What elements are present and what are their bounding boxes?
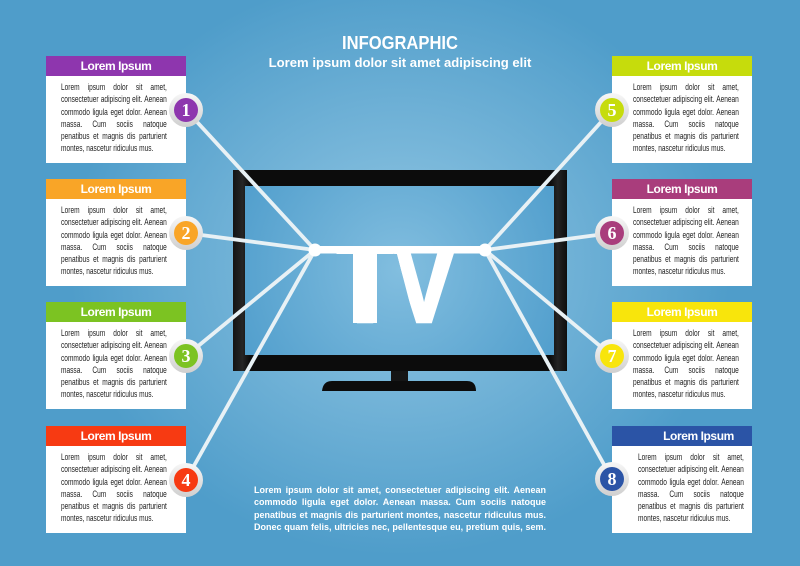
panel: item 5: commodo ligula eget dolor. Aenean xyxy=(632,107,738,117)
badge 3 xyxy=(169,339,203,373)
panel: item 5: montes, nascetur ridiculus mus. xyxy=(632,143,725,153)
panel: item 4: consectetuer adipiscing elit. Aenean xyxy=(60,464,166,474)
bottom text block xyxy=(254,485,546,532)
panel: item 5: Lorem Ipsum xyxy=(647,59,717,73)
panel: item 7: penatibus et magnis dis parturient xyxy=(632,377,738,387)
badge 1 xyxy=(169,93,203,127)
bottom text block: Lorem ipsum dolor sit amet, consectetuer adipiscing elit. Aenean xyxy=(254,485,546,495)
panel: item 8: consectetuer adipiscing elit. Aenean xyxy=(638,464,743,474)
panel: item 5 xyxy=(612,56,752,163)
panel: item 1: consectetuer adipiscing elit. Aenean xyxy=(60,94,166,104)
panel: item 2: Lorem Ipsum xyxy=(81,182,151,196)
panel: item 2 xyxy=(46,179,186,286)
badge 2: 2 xyxy=(182,223,190,243)
badge 4: 4 xyxy=(182,470,190,490)
diagram: television, connectors and number badges xyxy=(169,93,629,497)
panel: item 2: consectetuer adipiscing elit. Aenean xyxy=(60,217,166,227)
panel: item 3: Lorem ipsum dolor sit amet, xyxy=(60,328,166,338)
panel: item 2: montes, nascetur ridiculus mus. xyxy=(60,266,153,276)
bottom text block: penatibus et magnis dis parturient montes, nascetur ridiculus mus. xyxy=(254,510,546,520)
panel: item 1: penatibus et magnis dis parturient xyxy=(60,131,166,141)
panel: item 2: massa. Cum sociis natoque xyxy=(60,242,166,252)
panel: item 7: commodo ligula eget dolor. Aenean xyxy=(632,353,738,363)
panel: item 6: penatibus et magnis dis parturient xyxy=(632,254,738,264)
panel: item 2: penatibus et magnis dis parturient xyxy=(60,254,166,264)
panel: item 3: penatibus et magnis dis parturient xyxy=(60,377,166,387)
TV label with connector bar xyxy=(308,244,492,324)
badge 2 xyxy=(169,216,203,250)
panel: item 7: massa. Cum sociis natoque xyxy=(632,365,738,375)
panel: item 2: commodo ligula eget dolor. Aenean xyxy=(60,230,166,240)
panel: item 5: Lorem ipsum dolor sit amet, xyxy=(632,82,738,92)
bottom text block: commodo ligula eget dolor. Aenean massa. Cum sociis natoque xyxy=(254,497,546,507)
panel: item 7: Lorem ipsum dolor sit amet, xyxy=(632,328,738,338)
panel: item 1 xyxy=(46,56,186,163)
panel: item 6: montes, nascetur ridiculus mus. xyxy=(632,266,725,276)
panel: item 8: commodo ligula eget dolor. Aenean xyxy=(638,477,743,487)
panel: item 5: massa. Cum sociis natoque xyxy=(632,119,738,129)
panel: item 8: montes, nascetur ridiculus mus. xyxy=(638,513,730,523)
panel: item 1: commodo ligula eget dolor. Aenean xyxy=(60,107,166,117)
panel: item 7: montes, nascetur ridiculus mus. xyxy=(632,389,725,399)
badge 1: 1 xyxy=(182,100,190,120)
panel: item 6: consectetuer adipiscing elit. Aenean xyxy=(632,217,738,227)
panel: item 7 xyxy=(612,302,752,409)
panel: item 8: penatibus et magnis dis parturient xyxy=(638,501,743,511)
panel: item 7: consectetuer adipiscing elit. Aenean xyxy=(632,340,738,350)
panel: item 8: Lorem Ipsum xyxy=(663,429,734,443)
panel: item 7: Lorem Ipsum xyxy=(647,305,717,319)
badge 5: 5 xyxy=(608,100,616,120)
panel: item 1: Lorem Ipsum xyxy=(81,59,151,73)
title: INFOGRAPHIC xyxy=(342,33,458,53)
panel: item 8 xyxy=(612,426,752,533)
panel: item 1: massa. Cum sociis natoque xyxy=(60,119,166,129)
panel: item 5: penatibus et magnis dis parturient xyxy=(632,131,738,141)
panel: item 5: consectetuer adipiscing elit. Aenean xyxy=(632,94,738,104)
panel: item 4: commodo ligula eget dolor. Aenean xyxy=(60,477,166,487)
badge 5 xyxy=(595,93,629,127)
panel: item 6 xyxy=(612,179,752,286)
TV label with connector bar: TV xyxy=(337,226,455,345)
panel: item 1: montes, nascetur ridiculus mus. xyxy=(60,143,153,153)
panel: item 6: Lorem ipsum dolor sit amet, xyxy=(632,205,738,215)
television xyxy=(233,170,567,391)
panel: item 6: massa. Cum sociis natoque xyxy=(632,242,738,252)
subtitle: Lorem ipsum dolor sit amet adipiscing elit xyxy=(269,55,531,70)
panel: item 4: montes, nascetur ridiculus mus. xyxy=(60,513,153,523)
panel: item 2: Lorem ipsum dolor sit amet, xyxy=(60,205,166,215)
badge 8 xyxy=(595,462,629,496)
badge 7: 7 xyxy=(608,346,616,366)
panel: item 3 xyxy=(46,302,186,409)
panel: item 3: massa. Cum sociis natoque xyxy=(60,365,166,375)
badge 6: 6 xyxy=(608,223,616,243)
badge 6 xyxy=(595,216,629,250)
bottom text block: Donec quam felis, ultricies nec, pellentesque eu, pretium quis, sem. xyxy=(254,522,546,532)
panel: item 6: commodo ligula eget dolor. Aenean xyxy=(632,230,738,240)
panel: item 1: Lorem ipsum dolor sit amet, xyxy=(60,82,166,92)
panel: item 8: Lorem ipsum dolor sit amet, xyxy=(638,452,743,462)
panel: item 3: Lorem Ipsum xyxy=(81,305,151,319)
panel: item 8: massa. Cum sociis natoque xyxy=(638,489,743,499)
panel: item 3: montes, nascetur ridiculus mus. xyxy=(60,389,153,399)
badge 4 xyxy=(169,463,203,497)
panel: item 4: Lorem ipsum dolor sit amet, xyxy=(60,452,166,462)
panel: item 3: commodo ligula eget dolor. Aenean xyxy=(60,353,166,363)
panel: item 4 xyxy=(46,426,186,533)
connector lines xyxy=(186,110,612,480)
panel: item 3: consectetuer adipiscing elit. Aenean xyxy=(60,340,166,350)
panel: item 4: massa. Cum sociis natoque xyxy=(60,489,166,499)
panel: item 4: Lorem Ipsum xyxy=(81,429,151,443)
badge 8: 8 xyxy=(608,469,616,489)
panel: item 6: Lorem Ipsum xyxy=(647,182,717,196)
panel: item 4: penatibus et magnis dis parturient xyxy=(60,501,166,511)
badge 7 xyxy=(595,339,629,373)
badge 3: 3 xyxy=(182,346,190,366)
